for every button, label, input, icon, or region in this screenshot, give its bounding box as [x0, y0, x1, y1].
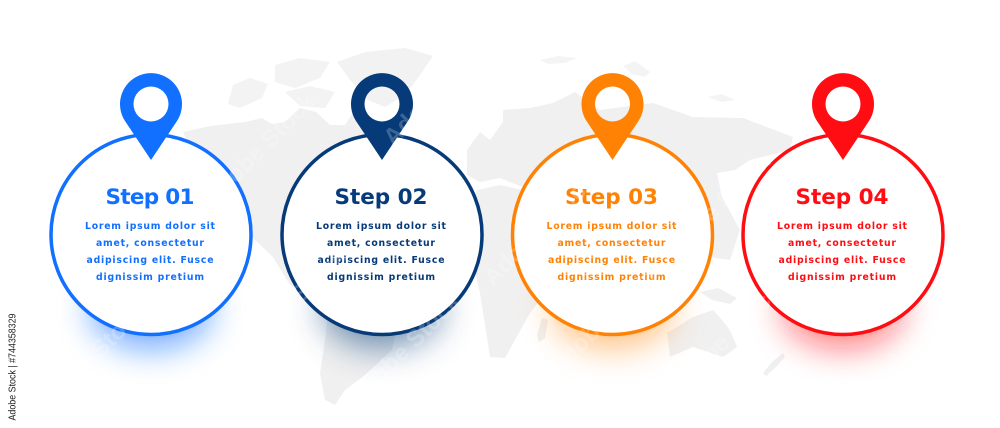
panel: step 01	[51, 73, 251, 348]
circle: blue outline	[51, 134, 251, 334]
shadow: navy glow	[322, 268, 442, 348]
watermark: repeated stock text: Adobe Stock	[378, 28, 502, 151]
icon: orange location pin	[582, 73, 644, 160]
text block: step 03 description: adipiscing elit. Fusce	[548, 255, 675, 266]
watermark: repeated stock text: Adobe Stock	[878, 253, 1000, 376]
panel: step 03	[512, 73, 712, 348]
circle: red outline	[743, 134, 943, 334]
watermark: repeated stock text: Adobe Stock	[343, 288, 467, 411]
shadow: red glow	[783, 268, 903, 348]
text block: step 02 description: adipiscing elit. Fusce	[318, 255, 444, 266]
panel: step 04	[743, 73, 943, 348]
shadow: orange glow	[552, 268, 672, 348]
shadow: blue glow	[91, 268, 211, 348]
watermark: repeated stock text: Adobe Stock	[478, 168, 602, 291]
text block: step 04 description: amet, consectetur	[788, 238, 896, 249]
text block: step 02 description	[316, 221, 447, 283]
text block: step 03 description: Lorem ipsum dolor sit	[546, 221, 677, 232]
panel: step 02	[282, 73, 482, 348]
icon: navy location pin	[351, 73, 413, 160]
text block: step 04 description: adipiscing elit. Fusce	[778, 255, 906, 266]
watermark: repeated stock text: Adobe Stock	[663, 278, 787, 401]
icon: red location pin	[812, 73, 874, 160]
heading: step 02: Step 02	[334, 185, 428, 210]
text block: step 01 description	[85, 221, 216, 283]
watermark: repeated stock text: Adobe Stock	[228, 243, 352, 366]
watermark: repeated stock text: Adobe Stock	[198, 88, 322, 211]
heading: step 03: Step 03	[565, 185, 658, 210]
text block: step 01 description: adipiscing elit. Fusce	[86, 255, 214, 266]
text block: step 02 description: amet, consectetur	[327, 238, 435, 249]
text block: step 03 description: dignissim pretium	[558, 272, 666, 283]
watermark: repeated stock text: Adobe Stock	[653, 148, 777, 271]
icon: blue location pin	[120, 73, 182, 160]
watermark: repeated stock text: Adobe Stock	[8, 18, 132, 141]
circle: orange outline	[512, 134, 712, 334]
watermark: repeated stock text: Adobe Stock	[543, 258, 667, 381]
heading: step 01: Step 01	[106, 185, 194, 210]
text block: step 03 description	[546, 221, 677, 283]
text block: step 03 description: amet, consectetur	[558, 238, 666, 249]
text block: step 01 description: Lorem ipsum dolor sit	[85, 221, 216, 232]
text block: step 04 description	[777, 221, 908, 283]
text block: step 01 description: dignissim pretium	[96, 272, 204, 283]
world map background	[183, 48, 822, 405]
text block: step 01 description: amet, consectetur	[96, 238, 204, 249]
text block: step 02 description: Lorem ipsum dolor sit	[316, 221, 447, 232]
heading: step 04: Step 04	[796, 185, 888, 210]
stock id label: Adobe Stock | #744358329	[6, 313, 18, 420]
text block: step 02 description: dignissim pretium	[327, 272, 435, 283]
watermark: repeated stock text: Adobe Stock	[28, 298, 152, 421]
text block: step 04 description: Lorem ipsum dolor sit	[777, 221, 908, 232]
text block: step 04 description: dignissim pretium	[788, 272, 896, 283]
circle: navy outline	[282, 134, 482, 334]
